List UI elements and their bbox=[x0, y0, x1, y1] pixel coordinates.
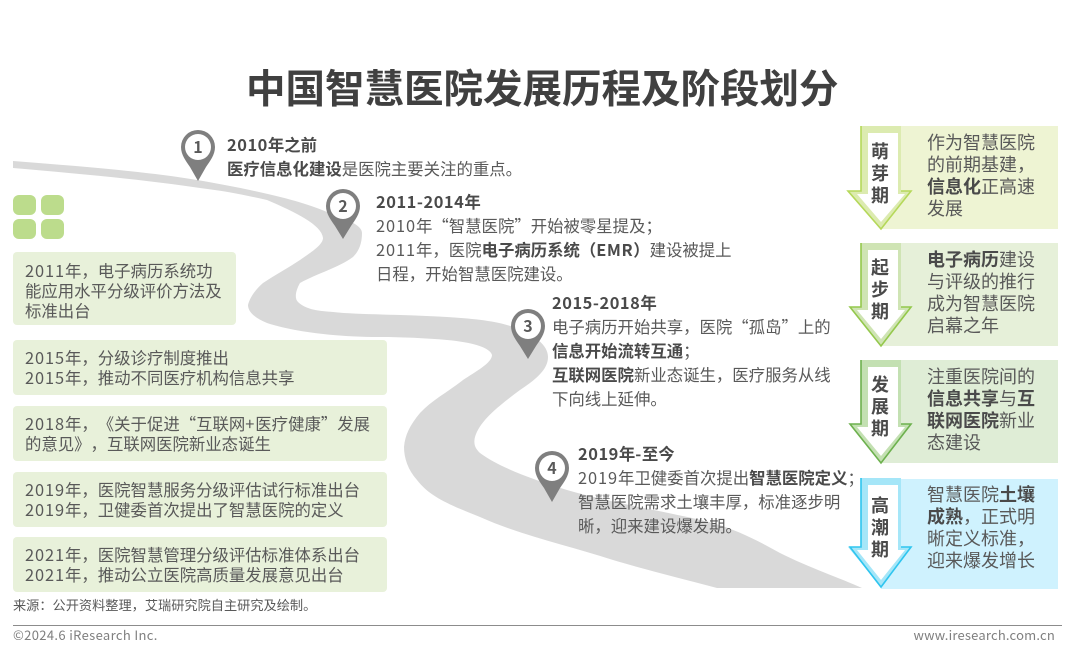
stage label bbox=[871, 371, 889, 441]
stage label: 步 bbox=[871, 276, 889, 302]
panel: 2011 event: 2011年，电子病历系统功 bbox=[25, 258, 213, 282]
panel: startup stage bbox=[848, 243, 1058, 348]
stage description: 联网医院新业 bbox=[927, 407, 1035, 433]
stage description: 信息化正高速 bbox=[927, 173, 1035, 199]
text block: 2015-2018: 2015-2018年 bbox=[552, 290, 657, 314]
panel: 2018 event: 2018年，《关于促进“互联网+医疗健康”发展 bbox=[25, 411, 370, 435]
stage description bbox=[927, 363, 1035, 455]
panel background bbox=[881, 126, 1058, 229]
stage description: 迎来爆发增长 bbox=[927, 547, 1035, 573]
pin 3: 3 bbox=[523, 313, 533, 337]
stage description: 的前期基建， bbox=[927, 151, 1035, 177]
text block: 2015-2018 bbox=[552, 290, 831, 410]
stage description bbox=[927, 481, 1035, 573]
text block: 2019 to present: 2019年-至今 bbox=[578, 441, 675, 465]
panel: 2011 event bbox=[13, 252, 236, 325]
stage label: 潮 bbox=[871, 514, 889, 540]
panel background bbox=[881, 479, 1058, 589]
stage description bbox=[927, 246, 1035, 338]
stage label: 萌 bbox=[871, 138, 889, 164]
stage description: 注重医院间的 bbox=[927, 363, 1035, 389]
panel: 2011 event: 能应用水平分级评价方法及 bbox=[25, 278, 222, 302]
website: www.iresearch.com.cn bbox=[914, 625, 1055, 644]
text block: 2011-2014: 2011-2014年 bbox=[376, 189, 481, 213]
source note: 来源：公开资料整理，艾瑞研究院自主研究及绘制。 bbox=[13, 595, 316, 614]
footer rule bbox=[13, 625, 1062, 626]
arrow bbox=[848, 243, 912, 348]
stage description: 与评级的推行 bbox=[927, 268, 1035, 294]
stage description: 智慧医院土壤 bbox=[927, 481, 1035, 507]
stage description: 电子病历建设 bbox=[927, 246, 1035, 272]
stage label: 展 bbox=[871, 393, 889, 419]
stage description: 启幕之年 bbox=[927, 312, 999, 338]
stage label: 起 bbox=[871, 254, 889, 280]
stage label: 发 bbox=[871, 371, 889, 397]
text block: 2011-2014: 日程，开始智慧医院建设。 bbox=[376, 261, 573, 285]
panel: 2018 event bbox=[13, 406, 387, 461]
stage label: 期 bbox=[871, 182, 889, 208]
stage description: 成熟，正式明 bbox=[927, 503, 1035, 529]
stage label bbox=[871, 138, 889, 208]
text block: 2011-2014: 2010年“智慧医院”开始被零星提及； bbox=[376, 213, 662, 237]
panel background bbox=[881, 243, 1058, 346]
panel: 2019 events: 2019年，医院智慧服务分级评估试行标准出台 bbox=[25, 477, 360, 501]
panel: 2019 events bbox=[13, 472, 387, 527]
text block: 2010 and before bbox=[227, 132, 522, 180]
pin 2: 2 bbox=[338, 193, 348, 217]
text block: 2019 to present: 智慧医院需求土壤丰厚，标准逐步明 bbox=[578, 489, 840, 513]
panel background bbox=[881, 360, 1058, 463]
copyright: ©2024.6 iResearch Inc. bbox=[13, 625, 158, 644]
stage label: 期 bbox=[871, 536, 889, 562]
text block: 2019 to present bbox=[578, 441, 864, 537]
stage label: 期 bbox=[871, 415, 889, 441]
stage label: 芽 bbox=[871, 160, 889, 186]
panel: 2015 events: 2015年，分级诊疗制度推出 bbox=[25, 345, 229, 369]
stage description: 信息共享与互 bbox=[927, 385, 1035, 411]
arrow bbox=[846, 126, 912, 230]
arrow bbox=[848, 360, 912, 464]
icon: four green rounded squares bbox=[13, 195, 64, 239]
text block: 2010 and before: 医疗信息化建设是医院主要关注的重点。 bbox=[227, 156, 522, 180]
panel: 2018 event: 的意见》，互联网医院新业态诞生 bbox=[25, 431, 271, 455]
stage description bbox=[927, 129, 1035, 221]
text block: 2011-2014: 2011年，医院电子病历系统（EMR）建设被提上 bbox=[376, 237, 732, 261]
panel: 2011 event: 标准出台 bbox=[25, 298, 91, 322]
stage label: 期 bbox=[871, 298, 889, 324]
panel: 2021 events: 2021年，推动公立医院高质量发展意见出台 bbox=[25, 562, 344, 586]
text block: 2015-2018: 下向线上延伸。 bbox=[552, 386, 667, 410]
stage description: 发展 bbox=[927, 195, 963, 221]
stage label bbox=[871, 492, 889, 562]
panel: 2021 events: 2021年，医院智慧管理分级评估标准体系出台 bbox=[25, 542, 360, 566]
text block: 2015-2018: 电子病历开始共享，医院“孤岛”上的 bbox=[552, 314, 831, 338]
text block: 2019 to present: 2019年卫健委首次提出智慧医院定义； bbox=[578, 465, 864, 489]
panel: development stage bbox=[848, 360, 1058, 464]
panel: 2021 events bbox=[13, 537, 387, 592]
stage description: 晰定义标准， bbox=[927, 525, 1035, 551]
stage description: 成为智慧医院 bbox=[927, 290, 1035, 316]
text block: 2011-2014 bbox=[376, 189, 732, 285]
pin 1: 1 bbox=[193, 134, 203, 158]
text block: 2015-2018: 互联网医院新业态诞生，医疗服务从线 bbox=[552, 362, 831, 386]
stage label bbox=[871, 254, 889, 324]
stage label: 高 bbox=[871, 492, 889, 518]
panel: 2015 events: 2015年，推动不同医疗机构信息共享 bbox=[25, 365, 294, 389]
stage description: 作为智慧医院 bbox=[927, 129, 1035, 155]
pin 4: 4 bbox=[547, 455, 557, 479]
panel: 2019 events: 2019年，卫健委首次提出了智慧医院的定义 bbox=[25, 497, 344, 521]
title: 中国智慧医院发展历程及阶段划分 bbox=[246, 58, 838, 115]
panel: sprout stage bbox=[846, 126, 1058, 230]
text block: 2019 to present: 晰，迎来建设爆发期。 bbox=[578, 513, 742, 537]
stage description: 态建设 bbox=[927, 429, 981, 455]
panel: 2015 events bbox=[13, 340, 387, 395]
text block: 2015-2018: 信息开始流转互通； bbox=[552, 338, 700, 362]
text block: 2010 and before: 2010年之前 bbox=[227, 132, 317, 156]
